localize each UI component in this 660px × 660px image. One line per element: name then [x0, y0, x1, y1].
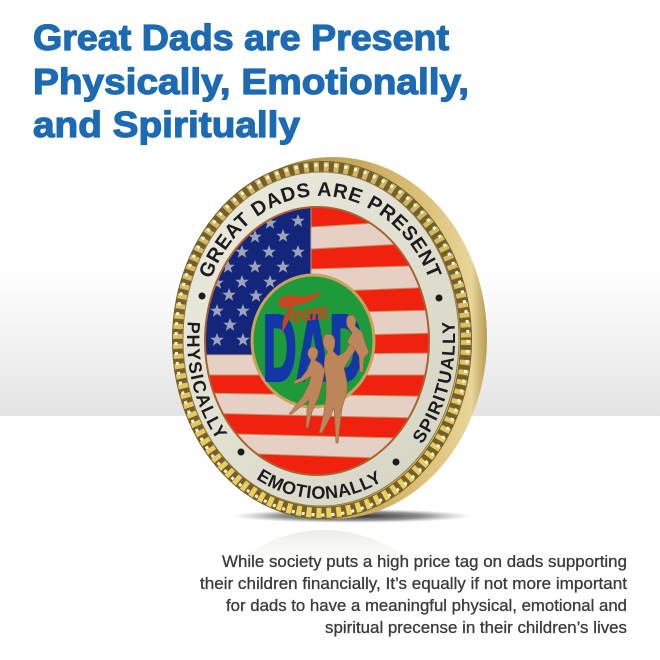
figure: small child: [289, 347, 325, 428]
title: [33, 17, 469, 145]
commemorative coin: [172, 157, 487, 519]
figure: parent: [319, 330, 362, 443]
ring text: spiritually: SPIRITUALLY: [413, 322, 456, 443]
ring bullets: [198, 292, 442, 466]
title: and Spiritually: [33, 104, 300, 145]
figures: family silhouette: [289, 315, 369, 443]
body paragraph: their children financially, It’s equally if not more important: [200, 575, 627, 593]
red stripes: [210, 208, 428, 474]
flag border: [205, 207, 429, 475]
coin edge: [179, 157, 487, 519]
body paragraph: spiritual precense in their children’s lives: [325, 619, 627, 637]
ring text: physically: PHYSICALLY: [187, 322, 228, 436]
body paragraph: While society puts a high price tag on dads supporting: [222, 553, 627, 571]
center medallion: [252, 275, 374, 407]
title: Great Dads are Present: [33, 17, 449, 58]
title: Physically, Emotionally,: [33, 61, 469, 102]
ring text: great dads are present: GREAT DADS ARE PRESENT: [200, 182, 442, 276]
rope border: [176, 165, 468, 515]
body paragraph: for dads to have a meaningful physical, emotional and: [226, 597, 627, 615]
stars: [210, 214, 305, 346]
flag: [206, 208, 428, 474]
canton: [206, 208, 312, 356]
figure: baby: [346, 315, 369, 372]
ring text: emotionally: EMOTIONALLY: [257, 468, 378, 499]
enamel ring: [183, 172, 459, 506]
center medallion: DAD: [263, 296, 363, 400]
background gradient band: [0, 270, 660, 416]
body paragraph: [200, 553, 627, 637]
coin shadow: [232, 509, 472, 523]
Team script: eam: [290, 298, 329, 328]
coin reflection: [215, 526, 440, 580]
